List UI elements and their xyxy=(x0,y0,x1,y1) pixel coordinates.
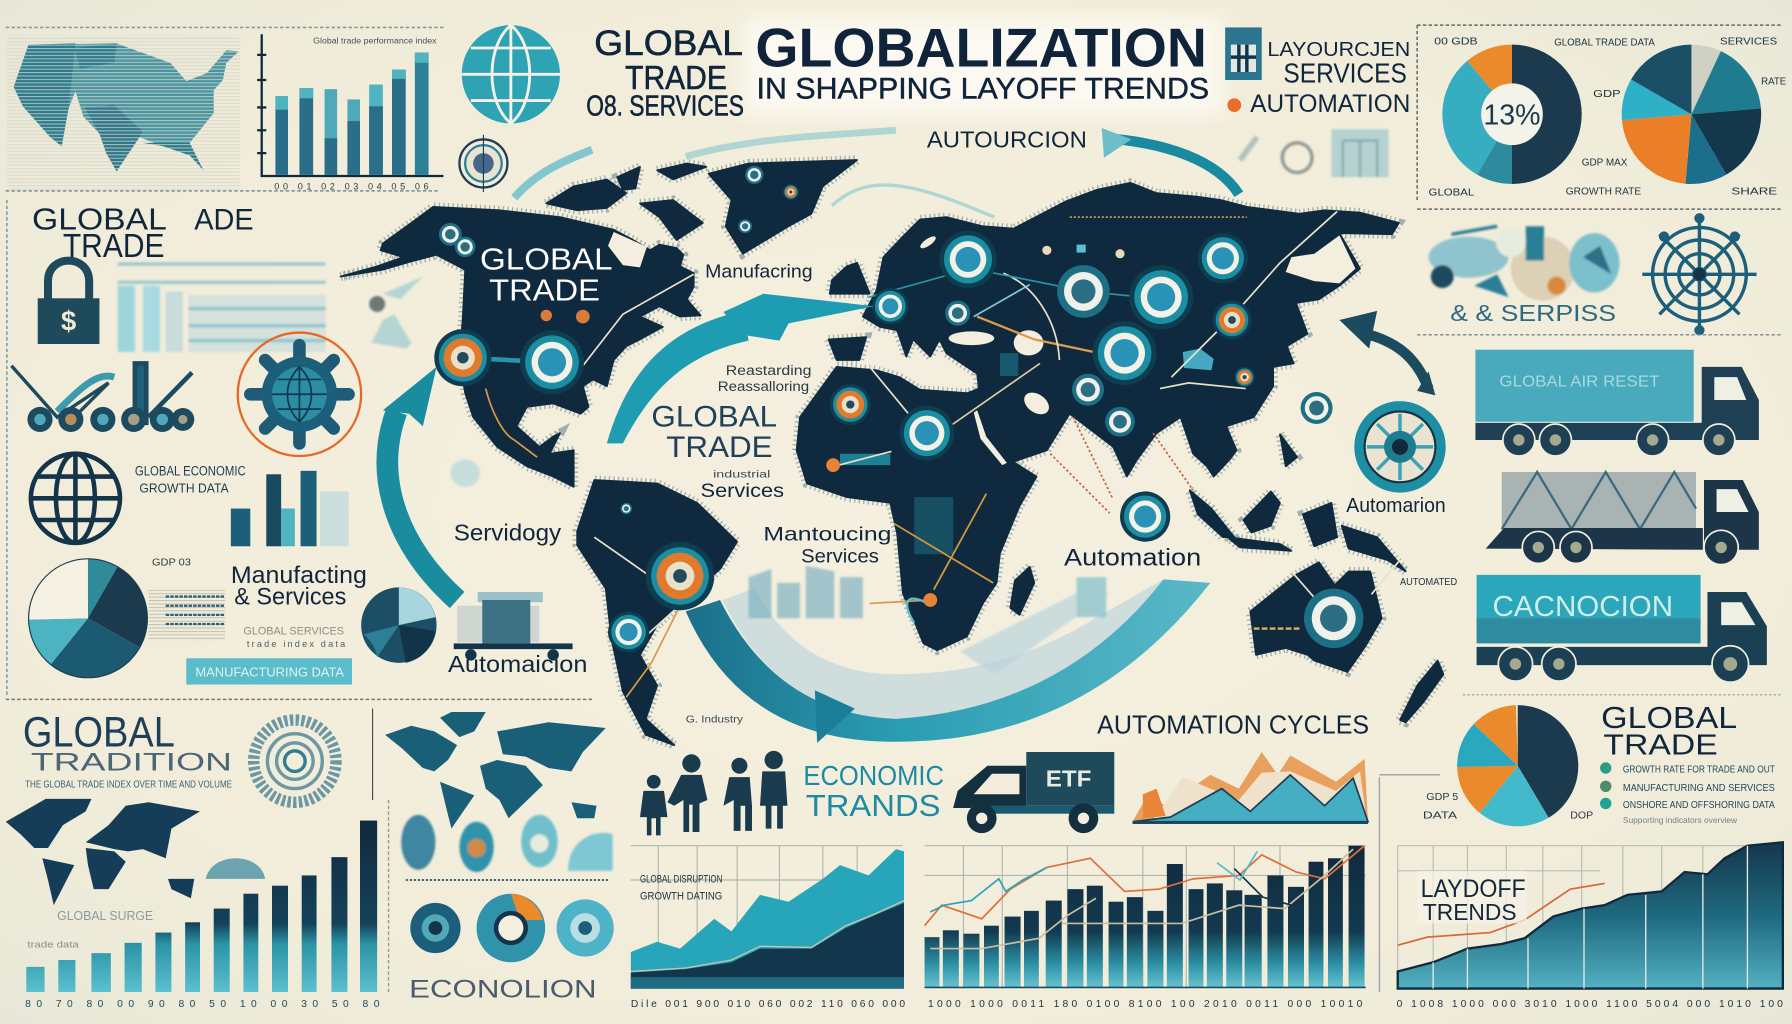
heading: global tradition: GLOBAL xyxy=(23,708,175,755)
world map xyxy=(341,160,1443,745)
faint icons near autourcion xyxy=(1240,129,1389,177)
faint label chip xyxy=(206,858,265,879)
arrow: left arc xyxy=(383,367,457,600)
arrow: top right sweep xyxy=(1102,128,1239,194)
heading: layoutsourcing services automation: LAYOURCJEN xyxy=(1267,38,1410,61)
pie labels: GDP xyxy=(1593,89,1621,100)
bar axis labels: 80 70 80 00 90 80 50 10 00 30 50 80 xyxy=(25,999,380,1010)
rule: bottom left section xyxy=(6,698,594,700)
pie labels: GROWTH RATE xyxy=(1566,186,1641,197)
chart: teal area xyxy=(631,846,905,1010)
vertical divider xyxy=(372,709,374,800)
orange dot xyxy=(1227,98,1241,112)
icon: building tile xyxy=(1225,27,1262,80)
icon: teal globe xyxy=(462,25,560,123)
small faded caption: GLOBAL SERVICES xyxy=(243,625,344,637)
icon: ship wheel xyxy=(1642,214,1757,335)
arrow: right dark arc xyxy=(1339,311,1435,395)
pie labels: GDP MAX xyxy=(1582,158,1628,169)
continent: arctic islands xyxy=(546,163,706,240)
divider xyxy=(1463,694,1783,696)
truck 1: GLOBAL AIR RESET xyxy=(1499,373,1660,390)
truck 1 xyxy=(1475,350,1759,456)
map: teal panels xyxy=(840,245,1214,554)
label: laydoff trends: TRENDS xyxy=(1423,899,1517,925)
heading: global trade left: TRADE xyxy=(625,60,727,97)
labels on the map xyxy=(448,261,1457,740)
icons row: three rings xyxy=(410,894,614,962)
icon: automation gear xyxy=(1354,401,1446,493)
labels on the map: Services xyxy=(701,480,784,502)
small faded caption: trade index data xyxy=(247,639,346,649)
map: continents xyxy=(341,160,1443,745)
continent: south america xyxy=(577,480,737,745)
small labels xyxy=(27,909,153,949)
map heading: global trade: TRADE xyxy=(489,273,600,308)
map: lower left xyxy=(6,799,200,905)
scene: faint cityscape xyxy=(749,566,1109,674)
label: laydoff trends xyxy=(1417,871,1527,925)
map: circuit lines xyxy=(463,211,1400,697)
map: node rings xyxy=(434,166,1363,653)
heading: global trade mid left: TRADE xyxy=(63,228,165,265)
pie labels: SERVICES xyxy=(1720,37,1777,48)
chart axis labels: 00 01 02 03 04 05 06 xyxy=(274,182,429,192)
truck 2 xyxy=(1486,472,1759,565)
label: teal banner: MANUFACTURING DATA xyxy=(195,666,345,680)
vertical divider lower xyxy=(388,800,390,992)
bar chart: bottom left xyxy=(25,821,380,1010)
continent: australia xyxy=(1250,562,1382,672)
text: serpiss: & & SERPISS xyxy=(1450,300,1616,326)
legend xyxy=(1600,762,1775,825)
text: manufacturing and services xyxy=(231,562,367,611)
divider: bottom right chart xyxy=(1379,775,1440,992)
map heading: global trade: GLOBAL xyxy=(480,242,613,277)
continent: britain xyxy=(830,263,870,294)
arrow: top faint sweeps xyxy=(514,130,994,217)
title: GLOBALIZATION xyxy=(755,16,1207,78)
pie labels: SHARE xyxy=(1731,186,1777,197)
text: autourcion: AUTOURCION xyxy=(927,126,1087,152)
arrow: bottom swoosh xyxy=(686,579,1210,743)
chart: teal area: GROWTH DATING xyxy=(640,890,722,902)
continent: eurasia xyxy=(863,183,1399,477)
scene: faint icons above right side xyxy=(1429,226,1619,301)
text: globe caption: GLOBAL ECONOMIC xyxy=(135,463,246,478)
map heading: global trade xyxy=(480,242,613,308)
faded data table xyxy=(118,264,326,352)
chart note: GLOBAL DISRUPTION xyxy=(640,873,722,885)
pie labels: 00 GDB xyxy=(1434,37,1478,48)
divider dashes xyxy=(1417,334,1783,336)
bar chart: top left xyxy=(257,34,443,192)
heading: layoutsourcing services automation xyxy=(1225,27,1410,118)
heading: global trade left: GLOBAL xyxy=(594,23,743,63)
small labels: trade data xyxy=(27,939,80,949)
map: halftone coast halo xyxy=(341,160,1443,745)
continent: madagascar xyxy=(1010,567,1034,615)
map: small world xyxy=(385,712,606,829)
small faded caption xyxy=(243,625,346,649)
icon: padlock with dollar: $ xyxy=(61,305,76,336)
bar chart: mid left xyxy=(231,471,349,546)
pie: bottom right xyxy=(1487,735,1548,796)
panel: top right pies xyxy=(1417,25,1786,209)
striped mini table xyxy=(149,590,225,641)
pie: donut xyxy=(1477,79,1547,149)
small labels: GLOBAL SURGE xyxy=(57,909,153,923)
faint scene near west coast xyxy=(369,277,480,487)
pie labels xyxy=(1429,37,1786,198)
small label: GDP 03 xyxy=(152,558,191,569)
pie side labels: GDP 5 xyxy=(1426,792,1459,803)
panel: US dot map xyxy=(6,27,446,191)
faint left border line xyxy=(6,200,8,697)
text: globe caption: GROWTH DATA xyxy=(139,482,229,496)
continent: indonesia xyxy=(1190,434,1406,571)
heading: global tradition xyxy=(23,708,232,790)
people icons xyxy=(640,751,787,835)
heading: layoutsourcing services automation: AUTOMATION xyxy=(1250,90,1410,118)
heading: global trade bottom right: GLOBAL xyxy=(1601,700,1737,735)
icon: cart with building xyxy=(454,592,573,661)
chart: bars with lines xyxy=(925,846,1366,1010)
pie labels: GLOBAL TRADE DATA xyxy=(1554,38,1655,49)
pie: donut: 13% xyxy=(1483,100,1541,132)
icon: gear in orange ring xyxy=(238,333,361,456)
labels on the map: AUTOMATED xyxy=(1400,577,1457,588)
heading: global trade bottom right: TRADE xyxy=(1603,729,1718,761)
labels on the map: Servidogy xyxy=(454,520,562,546)
cut-outs: seas xyxy=(608,232,1355,465)
pie: segmented xyxy=(1657,79,1726,149)
arrow: middle arc xyxy=(607,294,874,443)
title: IN SHAPPING LAYOFF TRENDS xyxy=(757,72,1209,105)
text: econolion: ECONOLION xyxy=(409,976,597,1004)
text: globe caption xyxy=(135,463,246,496)
heading: global trade mid left: GLOBAL xyxy=(32,202,167,237)
labels on the map: Mantoucing xyxy=(763,524,891,546)
labels on the map: Automation xyxy=(1064,545,1201,572)
icon: delivery truck: ETF xyxy=(1046,765,1091,791)
legend: Supporting indicators overview xyxy=(1623,816,1737,825)
pie labels: GLOBAL xyxy=(1429,187,1475,198)
truck 3: CACNOCION xyxy=(1493,591,1673,623)
small caption: center: Reassalloring xyxy=(718,379,809,394)
chart: mountains xyxy=(1133,752,1368,823)
labels on the map: AUTOMATION CYCLES xyxy=(1097,710,1369,740)
continent: iberia xyxy=(829,337,866,360)
continent: new zealand xyxy=(1400,661,1443,722)
axis labels: Dile 001 900 010 060 002 110 060 000 xyxy=(631,999,905,1010)
heading: global tradition: THE GLOBAL TRADE INDEX OVER TIME AND VOLUME xyxy=(25,779,232,790)
labels on the map: Services xyxy=(801,545,879,567)
label: teal banner xyxy=(186,658,352,685)
labels on the map: Manufacring xyxy=(705,261,813,282)
label: laydoff trends: LAYDOFF xyxy=(1421,875,1526,903)
icons row: four small xyxy=(401,815,613,872)
title xyxy=(755,16,1209,105)
icon: outline globe xyxy=(31,454,120,543)
heading: global trade bottom right xyxy=(1601,700,1737,761)
icon: padlock with dollar xyxy=(38,261,99,344)
pie: small photo xyxy=(361,587,437,663)
labels on the map: G. Industry xyxy=(686,714,744,725)
pie labels: RATE xyxy=(1761,77,1786,88)
pie side labels: DATA xyxy=(1423,810,1457,821)
chart: layoff trends area xyxy=(1397,842,1783,1010)
pie side labels xyxy=(1423,792,1593,821)
icon: spiral medallion xyxy=(254,720,336,802)
icon: small medallion xyxy=(459,135,507,192)
heading: global trade left xyxy=(586,23,744,122)
pie side labels: DOP xyxy=(1570,810,1593,821)
heading: economic trands xyxy=(803,760,944,823)
small caption: center: Reastarding xyxy=(726,363,811,378)
labels on the map: industrial xyxy=(713,470,770,481)
small caption: center xyxy=(718,363,811,394)
axis labels: 1000 1000 0011 180 0100 8100 100 2010 0011 000 10010 xyxy=(928,999,1363,1010)
heading: global trade mid left: ADE xyxy=(194,204,254,237)
heading: global trade left: O8. SERVICES xyxy=(586,90,744,122)
labels on the map: TRADE xyxy=(666,431,773,464)
continent: north america xyxy=(341,207,701,487)
axis labels: 0 1008 1000 000 3010 1000 1100 5004 000 1010 100 xyxy=(1397,999,1783,1010)
labels on the map: Automarion xyxy=(1346,494,1446,517)
chart heading: Global trade performance index xyxy=(313,36,437,45)
pie: mid left xyxy=(29,559,147,678)
labels on the map: GLOBAL xyxy=(651,400,777,433)
continent: greenland xyxy=(709,160,857,254)
heading: layoutsourcing services automation: SERVICES xyxy=(1283,57,1407,88)
heading: global trade mid left xyxy=(32,202,254,265)
text: manufacturing and services: & Services xyxy=(234,584,346,611)
rule xyxy=(406,879,609,881)
heading: global tradition: TRADITION xyxy=(31,748,232,776)
text: manufacturing and services: Manufacting xyxy=(231,562,367,589)
heading: economic trands: TRANDS xyxy=(806,788,941,823)
legend: MANUFACTURING AND SERVICES xyxy=(1623,783,1775,794)
labels on the map: Automaicion xyxy=(448,651,587,677)
icon: machinery wheels xyxy=(11,363,194,432)
heading: economic trands: ECONOMIC xyxy=(803,760,944,791)
continent: africa xyxy=(797,367,1037,650)
truck 3 xyxy=(1477,575,1767,682)
title backdrop glow xyxy=(743,17,1223,114)
icon: delivery truck xyxy=(953,752,1114,833)
